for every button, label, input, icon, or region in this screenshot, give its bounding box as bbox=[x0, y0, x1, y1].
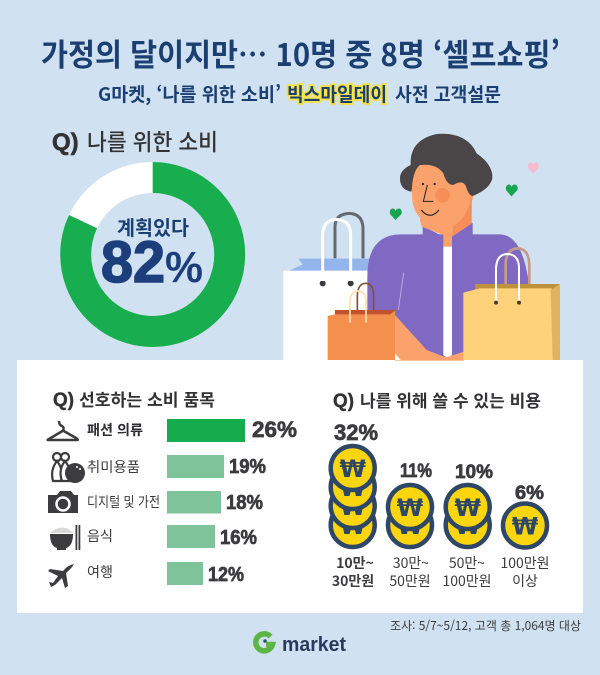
title: 가정의 달이지만… 10명 중 8명 ‘셀프쇼핑’ bbox=[41, 30, 560, 75]
row: digital: 18% bbox=[226, 492, 263, 514]
donut label: 계획있다 bbox=[117, 212, 189, 241]
illustration: shopper with bags bbox=[283, 134, 560, 361]
coin chart: 50만~100만원 10%: 50만~ bbox=[449, 553, 485, 573]
coin stack: ₩ bbox=[339, 455, 366, 483]
row: food: 음식 bbox=[87, 526, 113, 546]
coin stack bbox=[446, 485, 490, 547]
coin chart: 10만~30만원 32% bbox=[331, 420, 378, 591]
row: food: 16% bbox=[220, 527, 257, 549]
coin stack: ₩ bbox=[397, 494, 424, 522]
row: fashion: 패션 의류 bbox=[87, 420, 143, 440]
row: fashion: 26% bbox=[252, 417, 297, 442]
bar chart: preferred items bbox=[48, 417, 297, 588]
coin chart: 100만원 이상 6% bbox=[500, 483, 550, 591]
yellow bag bbox=[463, 248, 560, 360]
heading: donut question: 나를 위한 소비 bbox=[87, 123, 218, 157]
row: digital bbox=[48, 491, 263, 514]
row: travel: 12% bbox=[208, 564, 244, 586]
coin chart: 50만~100만원 10%: 10% bbox=[455, 462, 493, 483]
coin chart: 30만~50만원 11% bbox=[388, 461, 432, 591]
icon: pink heart bbox=[528, 162, 539, 174]
row: hobby bbox=[52, 453, 266, 483]
person bbox=[367, 134, 530, 361]
coin chart: 100만원 이상 6%: 100만원 bbox=[500, 553, 550, 573]
coin chart: 100만원 이상 6%: 6% bbox=[515, 483, 544, 504]
coin stack: ₩ bbox=[397, 512, 424, 540]
icon: hanger bbox=[48, 421, 78, 440]
row: hobby: 취미용품 bbox=[87, 457, 140, 477]
subtitle: G마켓, ‘나를 위한 소비’ bbox=[98, 80, 281, 107]
coin chart: 30만~50만원 11%: 50만원 bbox=[389, 571, 431, 591]
icon: green heart right bbox=[506, 184, 518, 196]
row: fashion bbox=[48, 417, 297, 442]
row: travel: 여행 bbox=[87, 562, 113, 582]
coin chart: 10만~30만원 32%: 32% bbox=[334, 420, 378, 445]
donut label: % bbox=[165, 243, 203, 292]
footnote: 조사: 5/7~5/12, 고객 총 1,064명 대상 bbox=[390, 617, 581, 634]
coin chart: 30만~50만원 11%: 30만~ bbox=[393, 553, 429, 573]
coin chart: 50만~100만원 10% bbox=[442, 462, 493, 591]
row: hobby: 19% bbox=[229, 456, 266, 478]
heading: donut question: Q) bbox=[52, 129, 79, 156]
icon: camera bbox=[48, 491, 78, 513]
coin chart: 30만~50만원 11%: 11% bbox=[400, 461, 432, 482]
subtitle bbox=[98, 80, 501, 107]
coin chart: 50만~100만원 10%: 100만원 bbox=[442, 571, 492, 591]
coin stack bbox=[331, 446, 375, 547]
orange bag bbox=[328, 283, 395, 360]
subtitle: 빅스마일데이 bbox=[287, 80, 387, 107]
icon: bowling bbox=[52, 453, 85, 483]
row: digital: 디지털 및 가전 bbox=[87, 492, 160, 512]
white panel bbox=[17, 360, 583, 613]
coin stack: ₩ bbox=[339, 493, 366, 521]
heading: affordable cost: 나를 위해 쓸 수 있는 비용 bbox=[360, 387, 541, 412]
donut label: 82 bbox=[101, 230, 165, 295]
subtitle: 사전 고객설문 bbox=[395, 80, 501, 107]
icon: G mark bbox=[256, 634, 272, 651]
icon: airplane bbox=[48, 564, 74, 588]
icon: green heart bbox=[390, 208, 402, 220]
coin chart: 10만~30만원 32%: 30만원 bbox=[332, 571, 374, 591]
row: travel bbox=[48, 562, 244, 588]
coin stack: ₩ bbox=[454, 494, 481, 522]
row: food bbox=[50, 525, 257, 550]
heading: preferred items: Q) bbox=[53, 390, 74, 411]
coin stack bbox=[388, 485, 432, 547]
coin stack: ₩ bbox=[339, 512, 366, 540]
donut chart: 82% bbox=[76, 178, 230, 332]
coin chart: 10만~30만원 32%: 10만~ bbox=[336, 553, 374, 573]
coin stack: ₩ bbox=[339, 474, 366, 502]
heading: affordable cost: Q) bbox=[333, 391, 354, 412]
coin stack: ₩ bbox=[454, 512, 481, 540]
logo: Gmarket bbox=[256, 634, 346, 656]
icon: rice bowl bbox=[50, 525, 80, 550]
heading: preferred items: 선호하는 소비 품목 bbox=[79, 386, 215, 411]
logo: Gmarket: market bbox=[282, 634, 346, 656]
coin: ₩ bbox=[512, 512, 539, 540]
white bag bbox=[283, 213, 372, 361]
coin chart: 100만원 이상 6%: 이상 bbox=[512, 571, 538, 591]
donut label bbox=[101, 212, 203, 295]
